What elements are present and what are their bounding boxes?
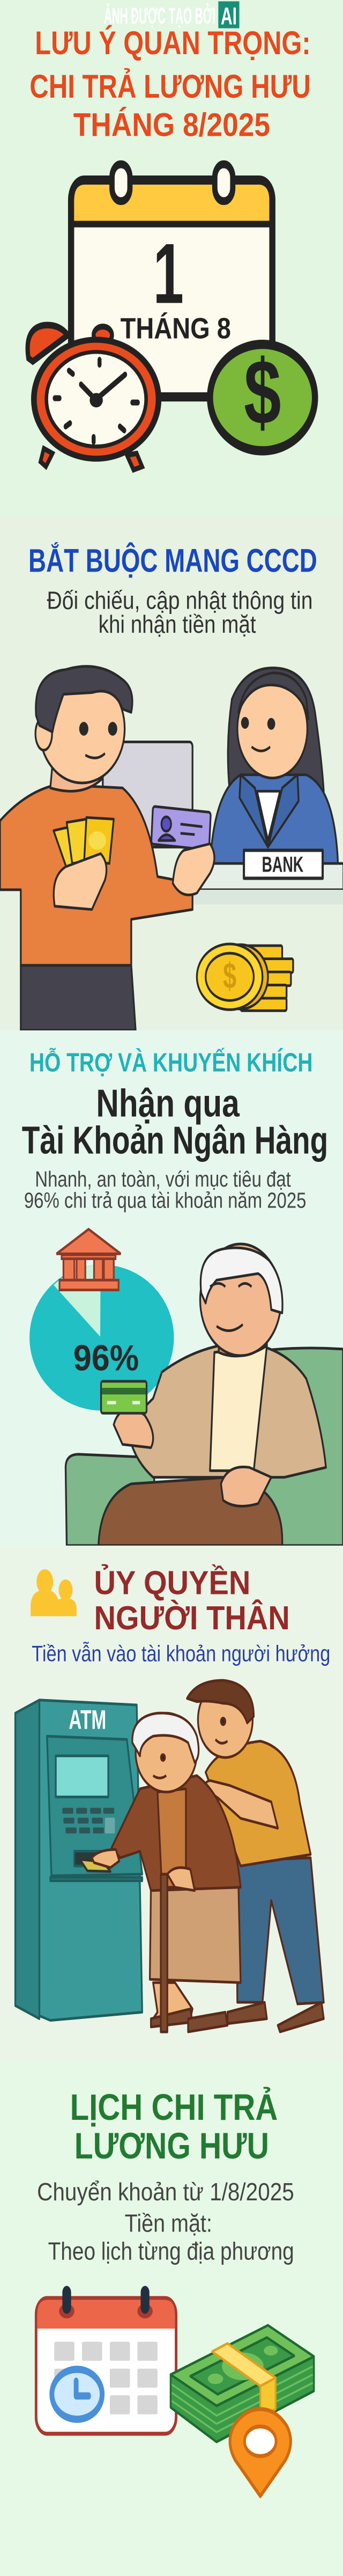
pie chart 96% — [29, 1265, 174, 1410]
heading: Nhận qua Tài Khoản Ngân Hàng: Tài Khoản Ngân Hàng — [22, 1119, 328, 1162]
title — [29, 25, 311, 144]
text block: schedule details: Tiền mặt: — [125, 2209, 212, 2237]
text block: subtitle: khi nhận tiền mặt — [99, 611, 256, 639]
illustration: ATM: ATM — [69, 1705, 106, 1735]
illustration: bank counter scene: $ — [223, 956, 236, 997]
heading: HỖ TRỢ VÀ KHUYẾN KHÍCH: HỖ TRỢ VÀ KHUYẾN KHÍCH — [29, 1047, 312, 1077]
section 3: bank account encouragement — [0, 1030, 343, 1546]
text block: description: 96% chi trả qua tài khoản năm 2025 — [24, 1189, 306, 1213]
pants — [99, 1477, 282, 1546]
woman face — [237, 679, 307, 778]
hand with card — [114, 1408, 153, 1448]
heading: BẮT BUỘC MANG CCCD: BẮT BUỘC MANG CCCD — [28, 542, 317, 579]
title: CHI TRẢ LƯƠNG HƯU — [29, 68, 311, 105]
heading: LỊCH CHI TRẢ LƯƠNG HƯU — [70, 2087, 278, 2167]
icon: dollar coin: $ — [244, 340, 281, 443]
title: THÁNG 8/2025 — [73, 107, 270, 144]
icon: money stack — [170, 2325, 314, 2442]
text block: subtitle: Tiền vẫn vào tài khoản người hưởng — [32, 1642, 330, 1666]
heading: LỊCH CHI TRẢ LƯƠNG HƯU: LƯƠNG HƯU — [74, 2126, 269, 2167]
icon: calendar with clock — [36, 2286, 176, 2434]
section 1: header with calendar — [26, 1, 318, 473]
text block: schedule details — [37, 2178, 294, 2265]
woman blazer — [210, 775, 338, 863]
section 5: payment schedule — [34, 2087, 315, 2498]
illustration: young man helping — [187, 1680, 324, 2032]
hand on knee — [221, 1467, 271, 1506]
text block: schedule details: Theo lịch từng địa phương — [48, 2237, 294, 2265]
heading: Nhận qua Tài Khoản Ngân Hàng — [22, 1082, 328, 1162]
man body — [0, 785, 192, 965]
man head — [50, 752, 103, 791]
BANK sign — [244, 850, 323, 879]
cash bills — [54, 828, 81, 868]
illustration: elderly man in armchair — [65, 1244, 343, 1546]
icon: calendar: THÁNG 8 — [121, 312, 231, 345]
text block: subtitle — [47, 587, 312, 639]
icon: alarm clock — [28, 325, 161, 470]
title: LƯU Ý QUAN TRỌNG: — [35, 25, 311, 62]
heading: ỦY QUYỀN NGƯỜI THÂN: NGƯỜI THÂN — [94, 1598, 290, 1637]
text block: description — [24, 1168, 306, 1213]
illustration: elderly woman with cane — [92, 1713, 241, 2032]
text block: description: Nhanh, an toàn, với mục tiêu đạt — [35, 1168, 291, 1191]
icon: bank building — [56, 1229, 121, 1290]
section 2: mandatory ID card — [0, 542, 343, 1030]
watermark: AI — [221, 3, 237, 30]
heading: Nhận qua Tài Khoản Ngân Hàng: Nhận qua — [96, 1082, 240, 1125]
armchair — [241, 1348, 343, 1546]
icon: calendar — [71, 164, 272, 397]
icon: people — [31, 1569, 77, 1616]
section 4: authorize relatives — [14, 1564, 330, 2033]
icon: dollar coin — [210, 340, 315, 451]
heading: ỦY QUYỀN NGƯỜI THÂN — [94, 1564, 290, 1637]
pie chart 96%: 96% — [73, 1338, 139, 1379]
text block: subtitle: Đối chiếu, cập nhật thông tin — [47, 587, 312, 614]
counter — [190, 863, 343, 890]
head — [219, 1320, 267, 1356]
heading: ỦY QUYỀN NGƯỜI THÂN: ỦY QUYỀN — [94, 1564, 250, 1602]
cardigan body — [127, 1343, 326, 1477]
illustration: bank counter scene: BANK — [262, 853, 303, 877]
watermark: ẢNH ĐƯỢC TẠO BỞI — [104, 2, 215, 28]
monitor — [103, 742, 192, 847]
ID card — [151, 806, 211, 850]
icon: location pin — [230, 2409, 290, 2496]
text block: schedule details: Chuyển khoản từ 1/8/2025 — [37, 2178, 294, 2206]
coins — [243, 946, 282, 960]
illustration: bank counter scene — [0, 667, 343, 1030]
icon: green bank card — [101, 1381, 146, 1413]
icon: calendar: 1 — [153, 226, 184, 321]
woman hair — [228, 668, 324, 791]
hands — [54, 854, 107, 910]
heading: LỊCH CHI TRẢ LƯƠNG HƯU: LỊCH CHI TRẢ — [70, 2087, 278, 2128]
illustration: ATM — [16, 1700, 142, 2021]
